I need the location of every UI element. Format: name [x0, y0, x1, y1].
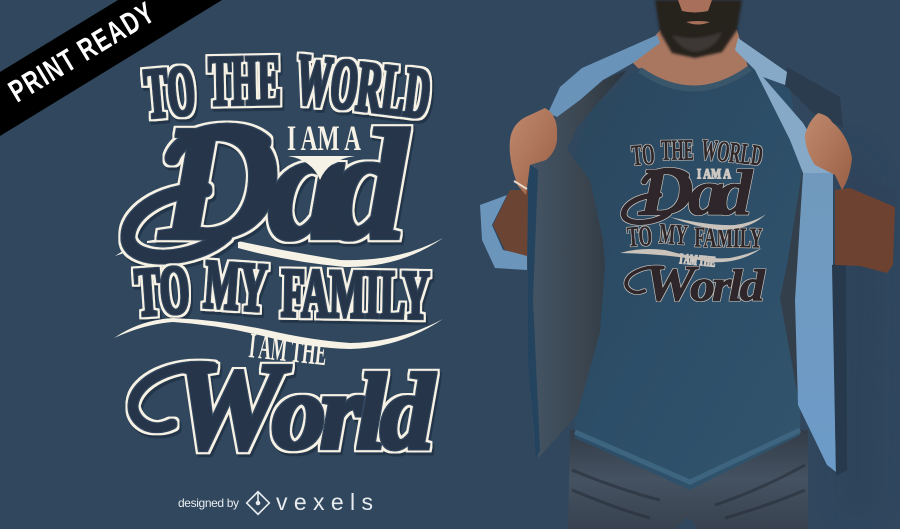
right jacket dark shoulder — [785, 67, 843, 128]
left forearm — [493, 190, 528, 256]
script word: world — [133, 338, 436, 476]
photo: man opening denim jacket — [480, 0, 897, 529]
left fist — [510, 108, 557, 195]
shirt print: d — [716, 157, 754, 229]
script word: world: W — [172, 338, 291, 476]
script word: dad: D — [158, 91, 279, 274]
credit: designed by vexels: designed by — [178, 496, 239, 510]
shirt collar shade — [640, 68, 750, 89]
credit: designed by vexels — [178, 489, 373, 515]
text: i am a: I AM A — [287, 118, 361, 158]
right jacket fold — [780, 167, 803, 408]
slogan artwork — [114, 38, 443, 476]
shirt print: WORLD — [699, 133, 765, 172]
shirt print: THE — [661, 133, 694, 167]
shirt print: W — [644, 255, 699, 312]
shirt print: TO — [630, 137, 656, 172]
heading: to my family — [133, 246, 430, 335]
script word: world: orld — [272, 353, 436, 472]
left cuff — [480, 195, 527, 270]
shirt print: a — [688, 157, 725, 229]
shirt hem — [575, 430, 800, 482]
left jacket placket — [528, 163, 540, 458]
right sleeve — [847, 173, 897, 210]
right forearm — [835, 188, 895, 273]
heading: to the world — [141, 38, 435, 134]
icon: vexels diamond — [247, 492, 269, 514]
jeans — [568, 430, 808, 529]
bracelet — [514, 181, 527, 189]
right jacket panel — [795, 173, 836, 472]
left jacket panel — [528, 70, 627, 458]
neck and chest — [633, 30, 748, 93]
beard — [655, 0, 742, 58]
flourish: d swash — [128, 130, 264, 257]
ornament: triangle — [288, 156, 355, 180]
left jacket collar — [548, 35, 660, 117]
heading: to the world: THE — [208, 40, 281, 121]
heading: to my family: MY — [202, 246, 269, 327]
shirt print waves — [620, 214, 766, 262]
shirt print: D — [638, 154, 693, 230]
beard grey — [672, 32, 722, 52]
script word: dad: d — [328, 98, 409, 273]
shirt print: MY — [658, 218, 689, 251]
heading: to my family: TO — [133, 251, 192, 332]
heading: to the world: TO — [141, 50, 198, 134]
shirt print: I AM THE — [679, 251, 716, 270]
shirt print: I AM A — [697, 166, 732, 182]
shirt print: orld — [690, 262, 766, 311]
credit: designed by vexels: vexels — [276, 489, 373, 515]
face and lip — [678, 0, 712, 24]
shadow behind man — [845, 140, 875, 510]
right jacket collar strip — [735, 38, 833, 173]
script word: dad — [128, 91, 409, 274]
heading: to my family: FAMILY — [281, 255, 430, 335]
right jacket placket — [832, 260, 847, 476]
slogan artwork: WORLD — [292, 38, 435, 134]
shirt print — [624, 133, 766, 312]
wave: upper banner — [115, 237, 443, 267]
slogan artwork: I AM THE — [247, 325, 329, 373]
shirt — [570, 66, 804, 490]
right fist — [805, 113, 852, 190]
wave: lower banner — [114, 318, 443, 349]
shirt print: TO — [626, 220, 653, 253]
flourish: w curl — [133, 366, 212, 428]
script word: dad: a — [268, 98, 347, 273]
shirt print: FAMILY — [694, 221, 763, 254]
